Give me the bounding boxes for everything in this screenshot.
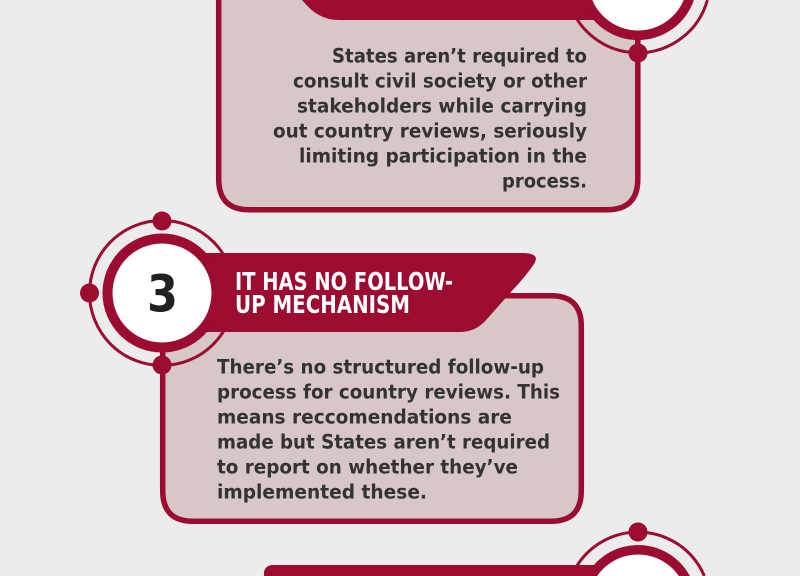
text: item 3 body: There’s no structured follow-up [217, 356, 544, 378]
card: item 3 background [163, 293, 581, 521]
text: item 2 body: States aren’t required to [332, 44, 587, 68]
panel: item 3 [80, 212, 581, 521]
icon: item 3 orbit ring and dots [80, 212, 234, 374]
text: item 3 body: to report on whether they’ve [217, 456, 518, 478]
text: item 2 body: limiting participation in the [299, 144, 587, 168]
badge: item 4 number circle [586, 545, 690, 576]
heading: item 3 [235, 267, 453, 319]
panel: item 4 [264, 522, 704, 576]
heading banner: item 3 [162, 253, 536, 332]
text: item 2 body: consult civil society or other [293, 70, 587, 92]
text: item 3 body: made but States aren’t required [217, 430, 550, 454]
text: item 2 body: stakeholders while carrying [297, 94, 587, 118]
number 3: 3 [147, 266, 178, 324]
heading: item 3: IT HAS NO FOLLOW- [235, 267, 453, 296]
text: item 2 body: process. [502, 170, 587, 192]
icon: item 2 orbit ring and dot [569, 0, 707, 62]
badge: item 2 number circle [582, 0, 694, 40]
panel: item 2 [219, 0, 707, 210]
text: item 3 body: implemented these. [217, 480, 427, 504]
heading banner: item 4 [264, 565, 638, 576]
card: item 2 border [219, 0, 638, 210]
card: item 2 background [219, 0, 638, 210]
badge: item 3 number circle [102, 234, 222, 352]
text: item 2 body [273, 44, 587, 192]
text: item 3 body: means reccomendations are [217, 406, 512, 428]
heading banner: item 2 [302, 0, 638, 20]
text: item 2 body: out country reviews, seriously [273, 120, 587, 142]
text: item 3 body [217, 356, 560, 504]
text: item 3 body: process for country reviews. This [217, 380, 560, 404]
icon: item 4 orbit ring and dot [572, 522, 704, 576]
heading: item 3: UP MECHANISM [235, 290, 410, 319]
